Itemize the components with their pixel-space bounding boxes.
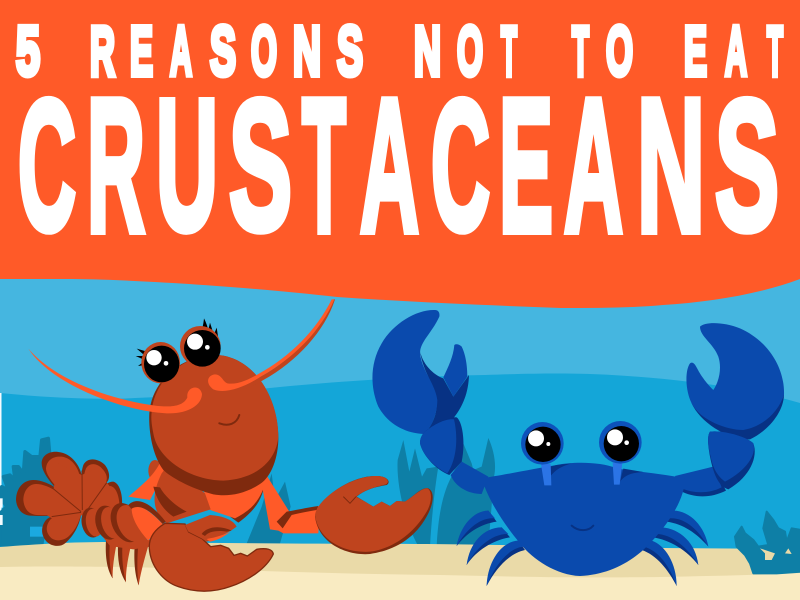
heading: 5 reasons not to eat: O (606, 12, 633, 90)
crab: right wrist (708, 431, 755, 489)
lobster: shoulder (128, 501, 166, 541)
crab character (372, 310, 784, 586)
crab: right arm (670, 467, 726, 496)
crab: tears (541, 463, 622, 485)
heading: 5 reasons not to eat: R (90, 12, 115, 90)
heading: 5 reasons not to eat: E (130, 12, 153, 90)
crab: left arm (451, 462, 488, 494)
lobster: smile (219, 415, 239, 425)
sand (0, 542, 800, 600)
heading: 5 reasons not to eat: T (572, 12, 589, 90)
heading: 5 reasons not to eat: O (457, 12, 483, 90)
lobster: head (149, 355, 278, 495)
heading: 5 reasons not to eat: A (725, 12, 747, 90)
lobster: antennae (28, 299, 335, 413)
title banner (0, 0, 800, 308)
lobster: tail legs (106, 540, 150, 585)
heading: 5 reasons not to eat: S (210, 12, 236, 90)
crab: left claw (372, 310, 469, 434)
lobster: right claw (315, 476, 433, 554)
lobster: right eye (180, 318, 221, 367)
seaweed: left coral (0, 438, 57, 545)
heading: crustaceans: S (229, 63, 292, 269)
crab: left wrist (420, 417, 463, 475)
crab: smile (572, 526, 593, 530)
crab: right eye (599, 421, 642, 464)
heading: 5 reasons not to eat: T (501, 12, 517, 90)
heading: 5 reasons not to eat: N (293, 12, 321, 90)
heading: crustaceans: C (431, 63, 490, 269)
heading: crustaceans: E (499, 60, 553, 272)
heading: 5 reasons not to eat (16, 12, 783, 90)
heading: crustaceans: A (564, 60, 623, 272)
crab: body (482, 463, 685, 576)
crab: legs (457, 511, 708, 586)
heading: crustaceans: C (18, 63, 76, 269)
heading: 5 reasons not to eat: E (684, 12, 707, 90)
seaweed: right coral (735, 512, 800, 573)
lobster: front claw (149, 515, 273, 591)
heading: crustaceans (18, 60, 779, 272)
lobster: right arm (261, 477, 320, 533)
crab: right claw (686, 323, 784, 439)
heading: 5 reasons not to eat: N (414, 12, 441, 90)
heading: crustaceans: U (156, 62, 218, 269)
heading: crustaceans: R (87, 60, 145, 272)
crab: left eye (521, 422, 564, 465)
heading: 5 reasons not to eat: O (251, 12, 277, 90)
seaweed: behind crab (397, 438, 495, 546)
lobster character (16, 299, 433, 591)
lobster: tail fan (16, 452, 122, 546)
heading: 5 reasons not to eat: 5 (16, 12, 40, 90)
lobster: tail segments (79, 498, 150, 549)
seaweed: behind lobster (247, 473, 291, 543)
heading: 5 reasons not to eat: A (170, 12, 192, 90)
heading: crustaceans: A (360, 60, 419, 272)
heading: 5 reasons not to eat: S (337, 12, 363, 90)
heading: crustaceans: N (637, 60, 705, 272)
lobster: back arm (128, 460, 168, 500)
lobster: left eye (136, 342, 180, 383)
lobster: body (153, 467, 267, 523)
heading: crustaceans: T (302, 60, 346, 272)
